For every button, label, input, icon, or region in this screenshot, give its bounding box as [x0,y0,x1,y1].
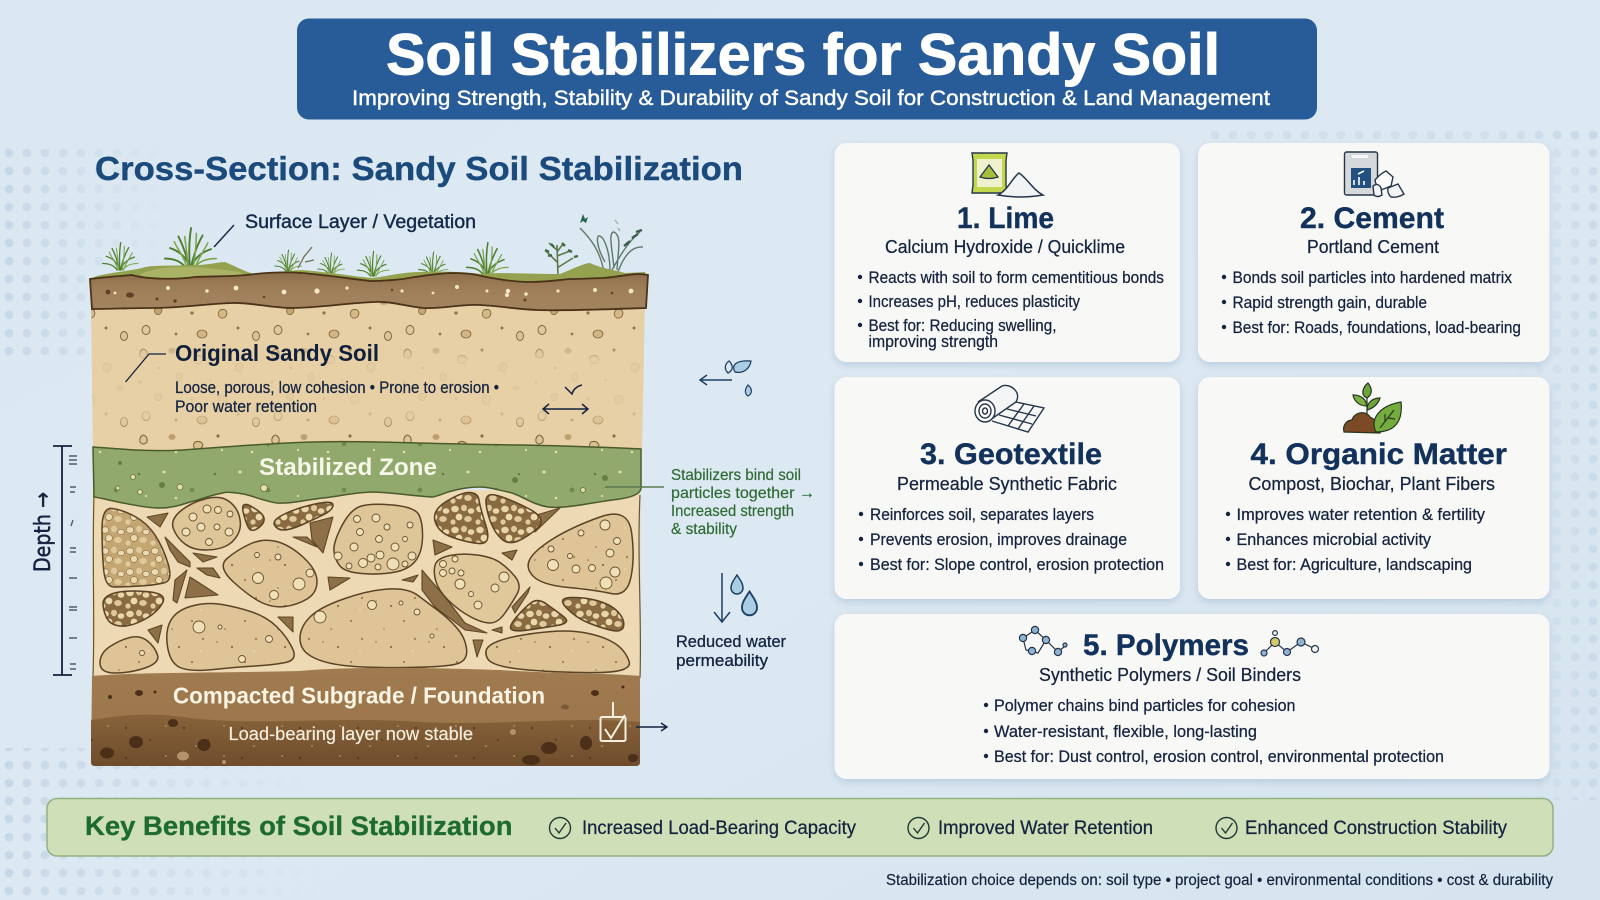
callout: stabilizers bind: particles together → [671,485,815,502]
icon: polymer left [1019,626,1067,656]
icon: water drops down [714,573,757,622]
callout: stabilizers bind [605,467,815,538]
bullets [1226,506,1486,574]
heading: 4. Organic Matter [1250,438,1507,471]
bullets: Reacts with soil to form cementitious bonds [868,269,1164,287]
card: 4 organic matter [1198,377,1550,599]
callout: reduced water permeability: permeability [676,651,768,670]
heading: 1. Lime [957,202,1054,235]
label: original sandy soil: Original Sandy Soil [175,340,379,366]
label: compacted subgrade: Compacted Subgrade / Foundation [173,682,545,708]
card: 1 lime [834,143,1180,362]
icon: cement bag [1344,152,1404,197]
subheading: Synthetic Polymers / Soil Binders [1039,664,1301,685]
arrow: subgrade [636,723,667,731]
card: 2 cement [1198,143,1550,362]
bullets: Enhances microbial activity [1236,531,1432,549]
label: original sandy soil: Poor water retention [175,398,317,416]
bullets [859,506,1164,574]
benefit 3: Enhanced Construction Stability [1245,818,1507,839]
layer: compacted subgrade [91,668,640,766]
layer: sandy soil [91,298,645,452]
depth label: Depth → [31,492,56,572]
bullets: Water-resistant, flexible, long-lasting [994,723,1257,741]
layer: stabilized zone [93,442,641,508]
bullets [858,269,1164,351]
label: load-bearing: Load-bearing layer now stable [228,724,473,744]
label: original sandy soil: Loose, porous, low cohesion • Prone to erosion • [175,379,499,397]
benefits heading: Key Benefits of Soil Stabilization [85,811,512,841]
bullets [984,697,1444,766]
title: Soil Stabilizers for Sandy Soil [386,22,1220,88]
bullets: improving strength [868,333,998,351]
footer note: Stabilization choice depends on: soil type • project goal • environmental conditions • cost & durability [886,872,1553,889]
layer: topsoil [90,272,648,310]
icon: check box [600,702,626,741]
bullets: Bonds soil particles into hardened matrix [1232,269,1513,287]
subtitle: Improving Strength, Stability & Durability of Sandy Soil for Construction & Land Management [352,87,1270,110]
soil cross-section diagram [90,212,648,766]
callout: reduced water permeability [676,632,786,670]
bullets: Increases pH, reduces plasticity [868,293,1081,311]
card: 5 polymers [834,614,1550,779]
title banner [297,18,1317,120]
heading: cross-section: Cross-Section: Sandy Soil Stabilization [95,150,743,187]
subheading: Compost, Biochar, Plant Fibers [1248,473,1495,494]
label: surface layer: Surface Layer / Vegetation [245,212,476,233]
bullets: Rapid strength gain, durable [1232,294,1427,312]
heading: 2. Cement [1300,202,1444,235]
callout: stabilizers bind: Stabilizers bind soil [671,467,801,484]
callout: reduced water permeability: Reduced water [676,632,786,651]
heading: 5. Polymers [1083,629,1249,662]
label: surface layer [214,212,476,247]
icon: plant and compost [1344,383,1401,433]
card: 3 geotextile [834,377,1180,599]
bullets: Best for: Dust control, erosion control, environmental protection [994,748,1444,766]
subheading: Portland Cement [1307,236,1439,257]
callout: stabilizers bind: & stability [671,521,737,538]
bullets: Best for: Agriculture, landscaping [1236,556,1472,574]
bullets [1222,269,1521,337]
bullets: Reinforces soil, separates layers [870,506,1094,524]
depth scale [31,446,77,675]
label: stabilized zone: Stabilized Zone [259,454,437,481]
bullets: Prevents erosion, improves drainage [870,531,1127,549]
bullets: Best for: Reducing swelling, [868,317,1056,335]
callout: stabilizers bind: Increased strength [671,503,794,520]
icon: polymer right [1261,631,1318,656]
subheading: Calcium Hydroxide / Quicklime [885,236,1125,257]
subheading: Permeable Synthetic Fabric [897,473,1117,494]
label: original sandy soil [126,340,499,416]
icon: lime bag [972,153,1043,197]
layer: cell matrix [92,490,640,680]
benefit 1: Increased Load-Bearing Capacity [582,818,856,839]
bullets: Polymer chains bind particles for cohesion [994,697,1296,715]
heading: 3. Geotextile [920,438,1102,471]
bullets: Best for: Roads, foundations, load-bearing [1232,319,1521,337]
key benefits bar [47,798,1553,856]
icon: water escaping arrow [700,361,751,396]
layer: vegetation [90,214,648,284]
icon: double arrow [543,385,588,414]
benefit 2: Improved Water Retention [938,818,1153,839]
icon: geotextile roll [975,385,1044,432]
bullets: Best for: Slope control, erosion protection [870,556,1164,574]
bullets: Improves water retention & fertility [1236,506,1486,524]
